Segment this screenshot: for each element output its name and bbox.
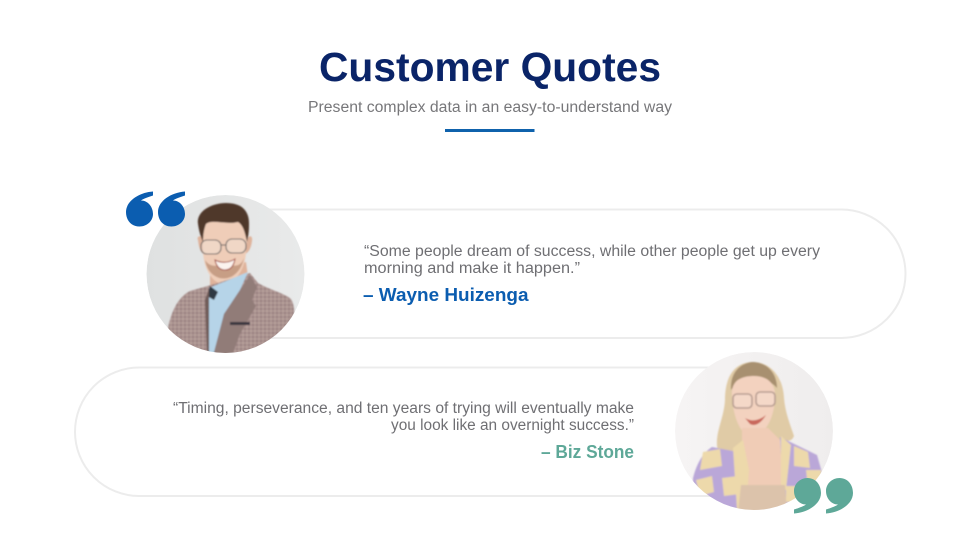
title underline [445, 129, 534, 132]
quote text 1: morning and make it happen.” [364, 260, 580, 277]
card 1 outline [200, 210, 906, 338]
attribution 1: – Wayne Huizenga [363, 284, 529, 305]
icon: opening quotation mark [126, 192, 185, 226]
title: Customer Quotes [319, 44, 661, 90]
portrait: woman [675, 352, 833, 512]
attribution 2: – Biz Stone [541, 441, 634, 462]
icon: closing quotation mark [794, 478, 853, 514]
panel: quote card 1 [126, 192, 906, 360]
quote text 1: “Some people dream of success, while other people get up every [364, 243, 820, 260]
card 2 outline [75, 368, 780, 496]
panel: quote card 2 [75, 352, 853, 514]
quote text 1 [364, 243, 820, 277]
quote text 2: “Timing, perseverance, and ten years of trying will eventually make [173, 400, 634, 417]
subtitle: Present complex data in an easy-to-understand way [308, 99, 672, 116]
quote text 2 [173, 400, 634, 434]
quote text 2: you look like an overnight success.” [391, 417, 634, 434]
portrait: man [146, 195, 304, 360]
